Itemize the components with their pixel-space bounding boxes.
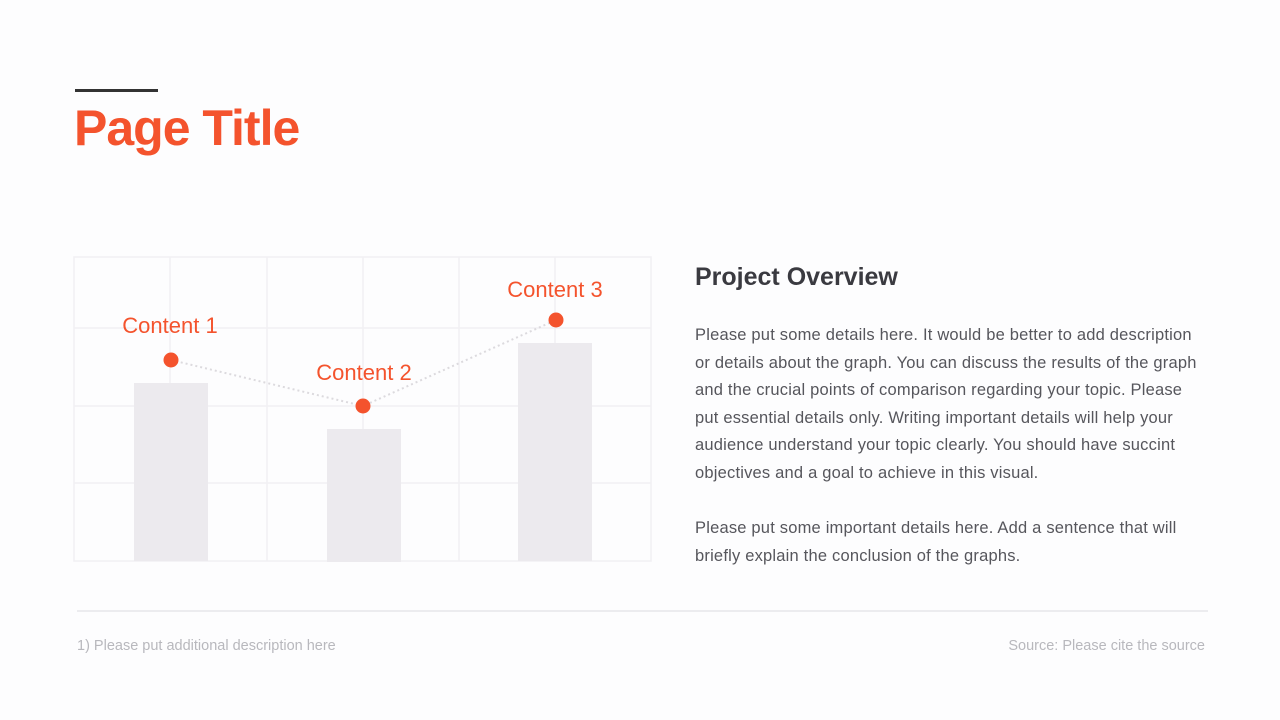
section heading: Project Overview — [695, 263, 898, 291]
source: Source: Please cite the source — [1008, 638, 1205, 654]
title accent line — [75, 89, 158, 92]
data labels: Content 1 — [122, 313, 218, 338]
page title: Page Title — [74, 100, 299, 156]
body text — [695, 326, 1197, 565]
data labels: Content 3 — [507, 277, 603, 302]
body text: Please put some details here. It would be better to add description or details about the graph. You can discuss the results of the graph and the crucial points of comparison regarding your topic. Please put essential details only. Writing important details will help your audience understand your topic clearly. You should have succint objectives and a goal to achieve in this visual. — [695, 326, 1197, 482]
data labels — [122, 277, 603, 385]
data labels: Content 2 — [316, 360, 412, 385]
chart — [74, 256, 652, 562]
footnote: 1) Please put additional description here — [77, 638, 336, 654]
bars — [134, 343, 592, 562]
data points — [164, 312, 564, 414]
trend line — [171, 320, 556, 406]
footer divider — [77, 610, 1208, 612]
body text: Please put some important details here. Add a sentence that will briefly explain the conclusion of the graphs. — [695, 519, 1176, 565]
